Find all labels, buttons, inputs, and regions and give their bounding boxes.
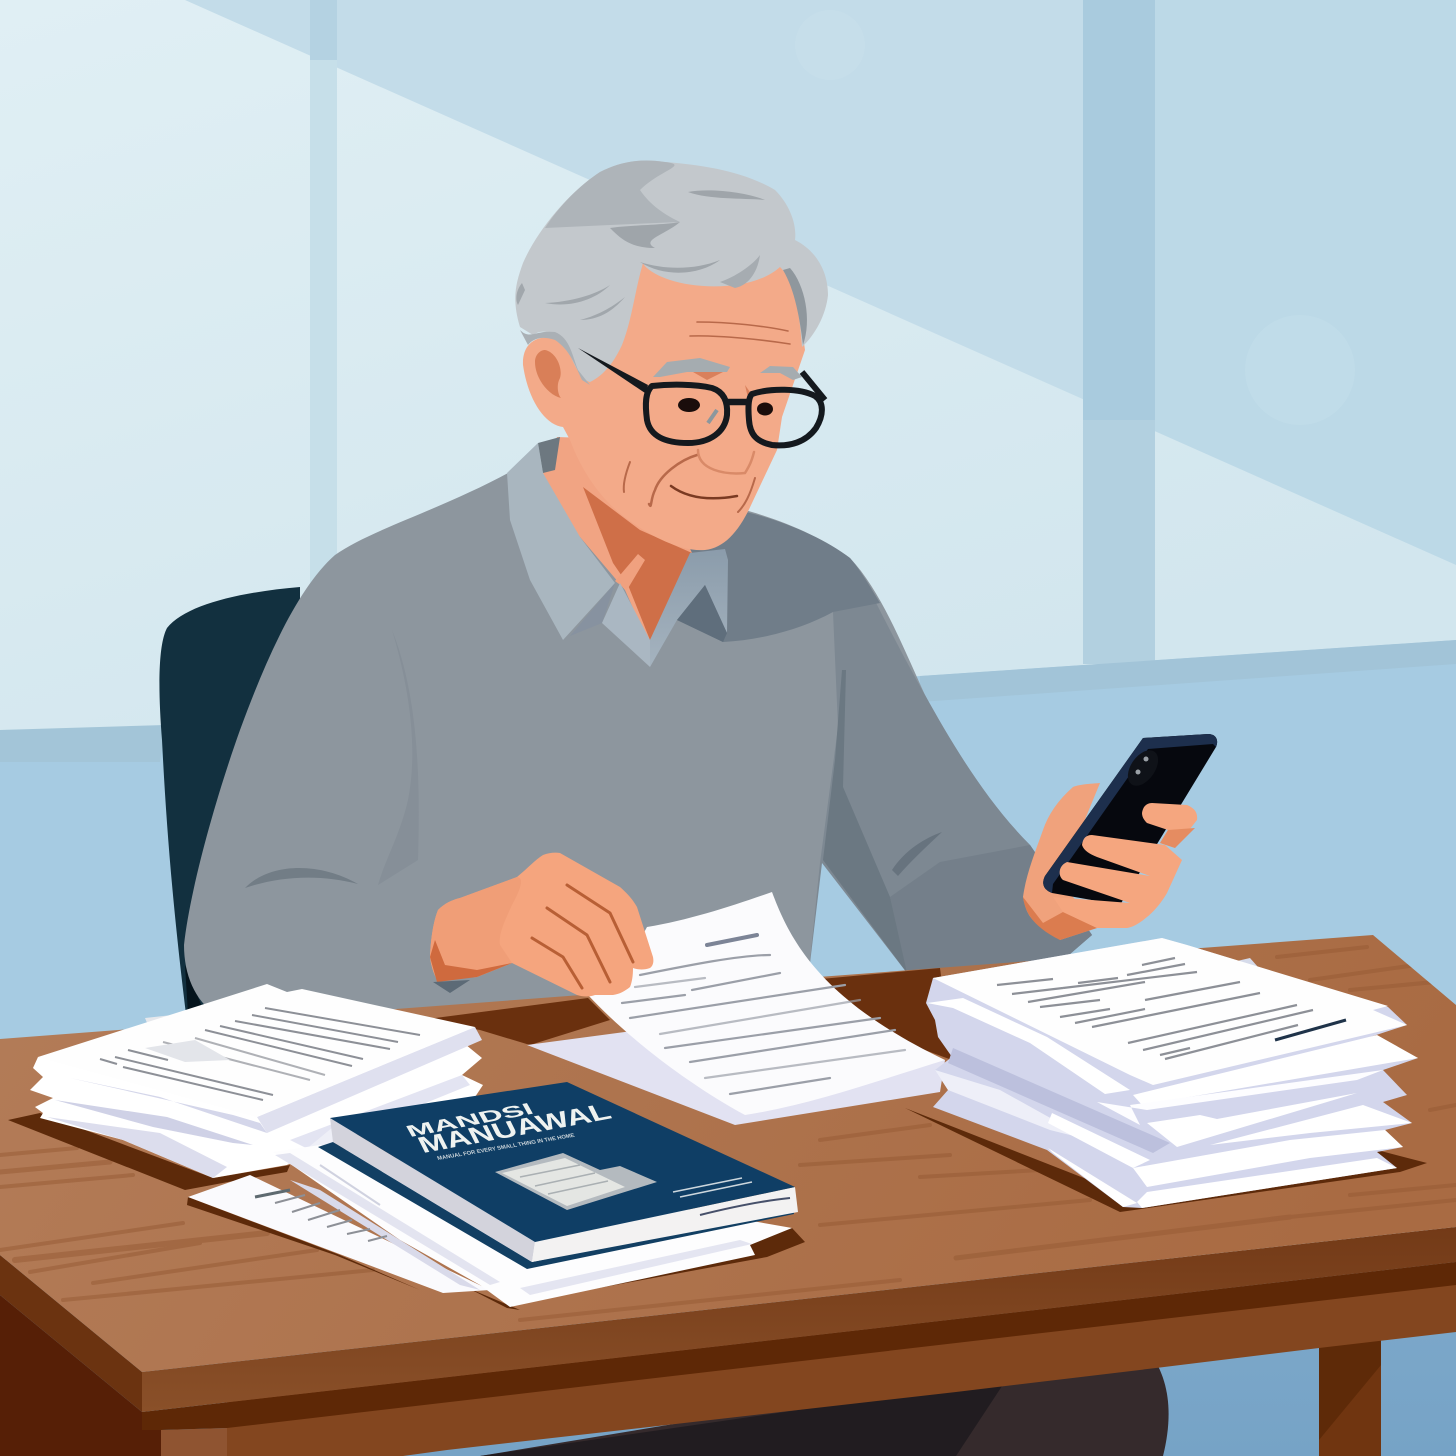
face <box>523 262 805 550</box>
left paper stack <box>30 984 483 1178</box>
hair <box>515 160 828 385</box>
nose bridge shadow <box>745 385 752 398</box>
fingers <box>1053 835 1182 928</box>
face lines <box>624 322 790 512</box>
sweater creases <box>378 630 419 885</box>
chair <box>159 587 300 1014</box>
eyes <box>678 398 700 412</box>
left hand on paper <box>430 853 653 996</box>
front cover <box>330 1082 795 1242</box>
back cover <box>318 1142 794 1269</box>
sweater body and arms <box>184 472 1092 1020</box>
shadows on table <box>420 998 610 1045</box>
table underside and legs <box>0 1295 161 1456</box>
small cover text <box>673 1178 752 1197</box>
hand back <box>1023 783 1100 940</box>
page block <box>330 1118 535 1262</box>
arm fold <box>823 670 907 973</box>
right paper stack <box>926 938 1418 1208</box>
manual book <box>318 1082 798 1269</box>
man <box>184 160 1092 1020</box>
wall in table shadow <box>0 1260 1456 1456</box>
table top <box>0 935 1456 1372</box>
table <box>0 935 1456 1456</box>
right hand and phone <box>1023 734 1217 940</box>
book title: MANUAWAL <box>414 1100 616 1158</box>
chest shadow <box>640 508 880 642</box>
ear inner <box>535 350 561 398</box>
papers under book <box>188 1145 792 1307</box>
sleeve lower shadow <box>890 845 1092 980</box>
wrist shadow <box>1023 897 1097 940</box>
book title: MANDSI <box>402 1099 537 1140</box>
glasses <box>578 348 825 445</box>
neck <box>543 437 692 642</box>
eyebrows <box>653 358 730 377</box>
right arm tone <box>808 595 1092 980</box>
folder icon on cover <box>495 1153 657 1210</box>
top finger <box>1142 803 1197 848</box>
center paper the man is holding <box>527 892 945 1125</box>
apron <box>227 1262 1456 1456</box>
side and front edges <box>0 1255 142 1412</box>
trousers under table <box>480 1366 1169 1456</box>
shirt collar <box>507 437 728 667</box>
gap between arm and torso <box>808 863 907 980</box>
phone <box>1043 734 1217 905</box>
manual book: MANUAL FOR EVERY SMALL THING IN THE HOME <box>436 1133 576 1162</box>
wood grain <box>0 947 1456 1320</box>
